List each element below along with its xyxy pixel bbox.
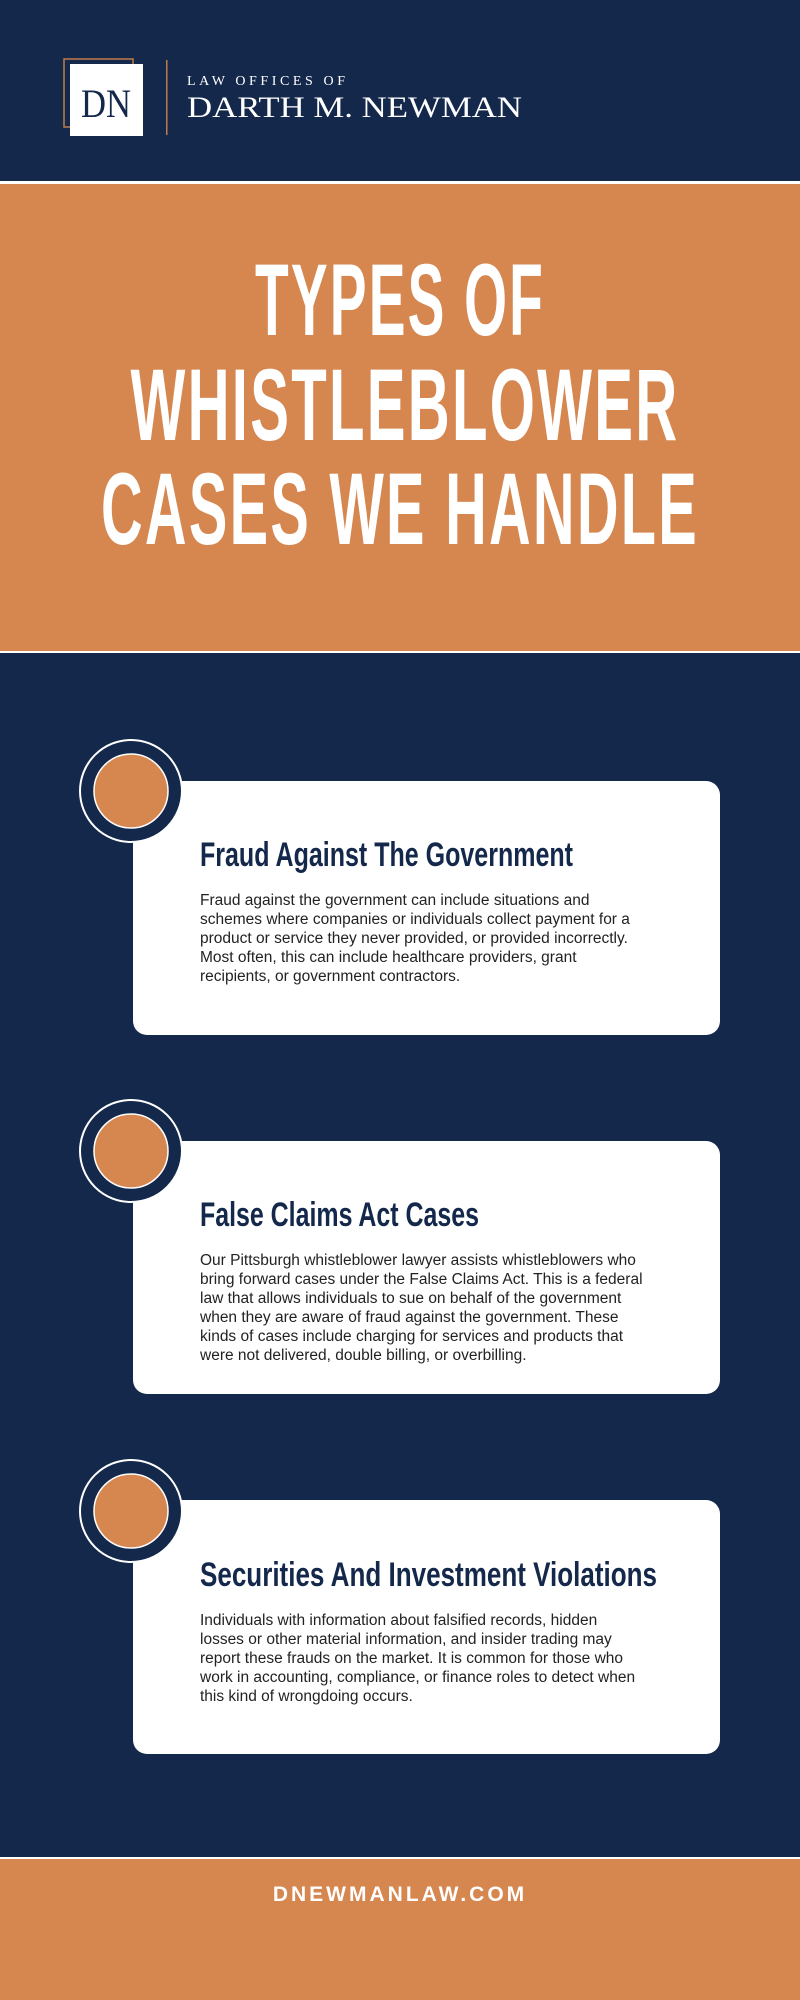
firm name <box>187 74 522 124</box>
title <box>101 243 699 566</box>
text 1: Most often, this can include healthcare providers, grant <box>200 949 577 966</box>
text 2: when they are aware of fraud against the government. These <box>199 1309 618 1326</box>
text 3: losses or other material information, and insider trading may <box>200 1631 612 1648</box>
title: TYPES OF <box>255 243 545 357</box>
text 1: product or service they never provided, or provided incorrectly. <box>200 930 628 947</box>
card 2 <box>80 1100 720 1394</box>
text 2: kinds of cases include charging for services and products that <box>200 1328 624 1345</box>
text 1 <box>200 892 630 985</box>
header band <box>0 0 800 182</box>
firm name: LAW OFFICES OF <box>187 74 345 89</box>
logo <box>64 59 168 136</box>
card 3 <box>80 1460 720 1754</box>
icon: circle 2 <box>80 1100 182 1202</box>
footer: DNEWMANLAW.COM <box>273 1883 527 1906</box>
card 1 <box>80 740 720 1035</box>
title band <box>0 184 800 651</box>
heading 3: Securities And Investment Violations <box>200 1556 657 1594</box>
text 3: this kind of wrongdoing occurs. <box>200 1688 413 1705</box>
text 2 <box>199 1252 643 1364</box>
text 3: report these frauds on the market. It is common for those who <box>200 1650 623 1667</box>
logo: DN <box>81 81 131 126</box>
heading 1: Fraud Against The Government <box>200 836 573 874</box>
text 2: Our Pittsburgh whistleblower lawyer assists whistleblowers who <box>200 1252 636 1269</box>
icon: circle 3 <box>80 1460 182 1562</box>
text 2: law that allows individuals to sue on behalf of the government <box>200 1290 622 1307</box>
text 1: Fraud against the government can include situations and <box>200 892 589 909</box>
firm name: DARTH M. NEWMAN <box>187 91 522 124</box>
footer <box>0 1859 800 2000</box>
text 1: recipients, or government contractors. <box>200 968 460 985</box>
text 2: were not delivered, double billing, or overbilling. <box>199 1347 527 1364</box>
text 3: Individuals with information about falsified records, hidden <box>200 1612 597 1629</box>
text 1: schemes where companies or individuals collect payment for a <box>200 911 630 928</box>
text 3: work in accounting, compliance, or finance roles to detect when <box>199 1669 635 1686</box>
heading 2: False Claims Act Cases <box>200 1196 479 1234</box>
icon: circle 1 <box>80 740 182 842</box>
text 2: bring forward cases under the False Claims Act. This is a federal <box>200 1271 643 1288</box>
text 3 <box>199 1612 635 1705</box>
